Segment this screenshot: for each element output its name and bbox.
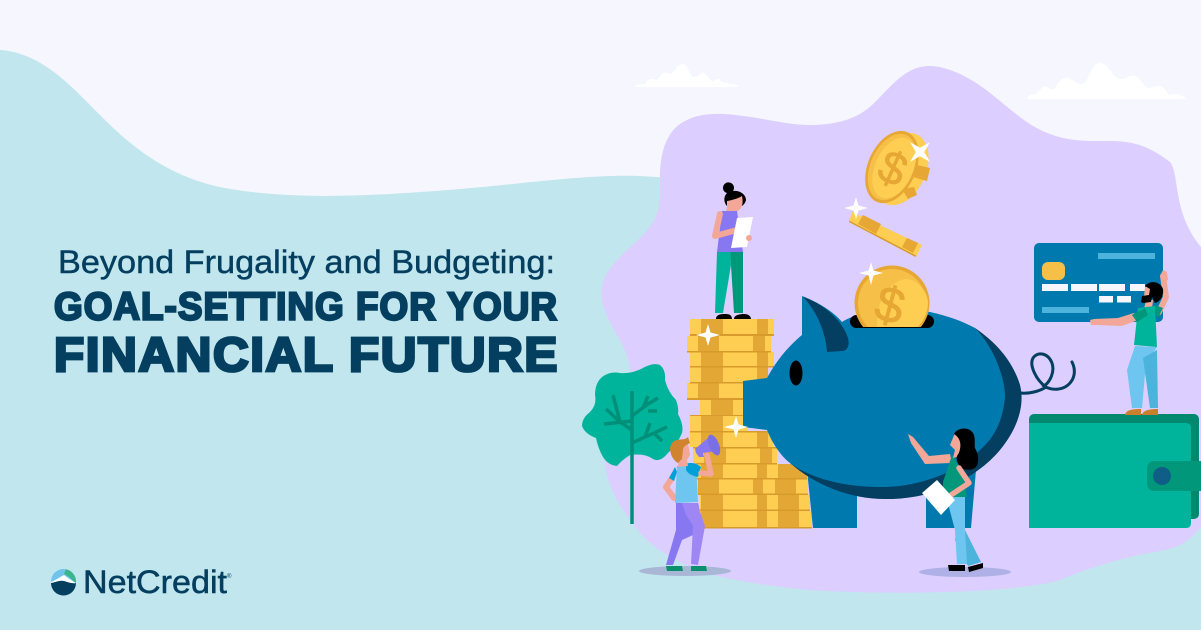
coin edge	[863, 124, 939, 214]
left arm	[666, 478, 674, 498]
legs	[666, 503, 704, 565]
right leg	[1143, 350, 1158, 408]
pig body shadow	[790, 328, 1022, 499]
person: woman reading on coins	[715, 182, 753, 319]
shirt	[943, 455, 967, 497]
shoes	[948, 563, 983, 572]
card body	[1034, 243, 1163, 322]
heading line 2: GOAL-SETTING FOR YOUR	[54, 284, 558, 328]
shoes	[716, 314, 751, 319]
tree foliage	[582, 364, 682, 466]
person: woman pointing at pig	[908, 429, 1011, 577]
head	[678, 443, 690, 467]
back arm	[948, 468, 969, 497]
chip	[1042, 262, 1065, 280]
sleeves	[669, 463, 701, 481]
wallet front	[1029, 423, 1191, 528]
megaphone	[695, 438, 716, 457]
hair	[723, 182, 746, 206]
shoes	[666, 566, 707, 571]
heading line 1: Beyond Frugality and Budgeting:	[58, 243, 555, 280]
clasp button	[1153, 467, 1171, 485]
credit card	[1034, 243, 1163, 322]
falling coin: tilted	[855, 123, 939, 214]
falling coin: edge-on	[849, 212, 922, 257]
coin rows	[687, 319, 812, 528]
logo wordmark: NetCredit	[83, 564, 227, 600]
pointing arm	[908, 434, 952, 464]
coin rim	[855, 123, 929, 211]
hair	[954, 429, 978, 470]
person: man with megaphone	[639, 433, 731, 576]
shoes	[1125, 409, 1158, 415]
coin slot	[850, 315, 934, 328]
face	[950, 433, 961, 458]
pig body	[743, 296, 1005, 487]
coin entering slot	[854, 266, 930, 327]
pig tail	[1020, 354, 1074, 393]
coin entering slot: $	[869, 274, 911, 336]
pig ear	[803, 297, 849, 352]
wallet	[1029, 414, 1201, 528]
person: man lifting card	[1090, 270, 1168, 415]
right arm	[701, 455, 711, 474]
neck	[1144, 300, 1153, 309]
logo icon	[51, 569, 76, 596]
wallet back	[1029, 414, 1199, 519]
paper	[922, 480, 955, 515]
hand on card	[1160, 270, 1168, 282]
pig eye	[790, 360, 802, 386]
sparkles	[696, 132, 940, 438]
face	[1144, 285, 1153, 297]
megaphone bell	[705, 433, 723, 457]
shadow	[639, 566, 731, 576]
coin row separators	[687, 334, 812, 528]
tree	[582, 364, 682, 524]
legs	[955, 510, 981, 566]
pig legs	[807, 470, 976, 528]
heading line 3: FINANCIAL FUTURE	[54, 329, 559, 382]
coin edge shading	[698, 319, 807, 528]
shirt	[675, 463, 698, 503]
cloud: left	[634, 64, 739, 87]
piggy bank	[743, 266, 1074, 528]
arm	[715, 214, 737, 236]
sleeves	[1132, 305, 1163, 322]
card number blocks	[1042, 284, 1145, 302]
torso	[717, 211, 743, 252]
tree trunk and branches	[604, 391, 667, 524]
background: purple blob	[601, 66, 1201, 593]
coin edge stripes	[902, 165, 930, 199]
title block	[54, 243, 559, 382]
coin face	[858, 126, 926, 208]
extended arm	[1090, 313, 1138, 326]
coin stack	[687, 319, 812, 528]
hair and beard	[1141, 282, 1163, 303]
hair	[670, 437, 690, 463]
raised arm	[1159, 276, 1166, 312]
wallet clasp	[1147, 461, 1201, 491]
shadow	[919, 567, 1011, 577]
bottom bar	[1042, 307, 1089, 313]
top bar	[1098, 253, 1155, 259]
left leg	[1127, 346, 1157, 408]
logo: NetCredit	[51, 564, 232, 600]
registered mark: ®	[227, 573, 232, 580]
pants	[715, 252, 731, 313]
paper	[731, 217, 753, 248]
cloud: right	[1027, 63, 1186, 99]
shirt	[1134, 306, 1157, 347]
face and neck	[725, 196, 743, 216]
dollar sign: $	[871, 139, 915, 197]
hand	[746, 235, 752, 241]
